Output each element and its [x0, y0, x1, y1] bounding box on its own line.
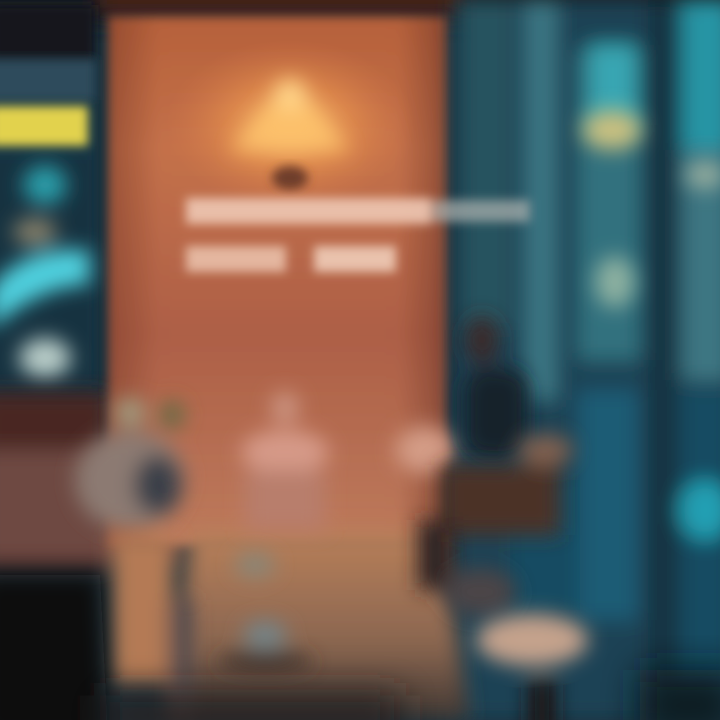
- lower right dark corner: [100, 670, 720, 720]
- panel: right windows: [455, 0, 720, 720]
- icon: glowing lamp: [165, 40, 415, 210]
- chairs and table group right: [418, 434, 573, 616]
- floor: [170, 530, 470, 720]
- table legs left: [112, 535, 192, 720]
- round table: [476, 614, 588, 720]
- top dark band: [0, 0, 720, 25]
- left lower brown area: [0, 392, 180, 572]
- panel: left window screen: [0, 5, 95, 385]
- yellow sign band: [0, 106, 88, 146]
- panel: orange wall: [108, 16, 448, 546]
- wall pale items: [241, 392, 455, 530]
- dark foreground corner: [0, 575, 108, 720]
- plant and chair: [75, 398, 185, 530]
- person silhouette: [464, 316, 528, 458]
- heading: blurred wall text: [186, 198, 530, 272]
- window highlights: [582, 110, 720, 308]
- floor tables: [217, 553, 313, 672]
- left screen highlights: [0, 165, 90, 378]
